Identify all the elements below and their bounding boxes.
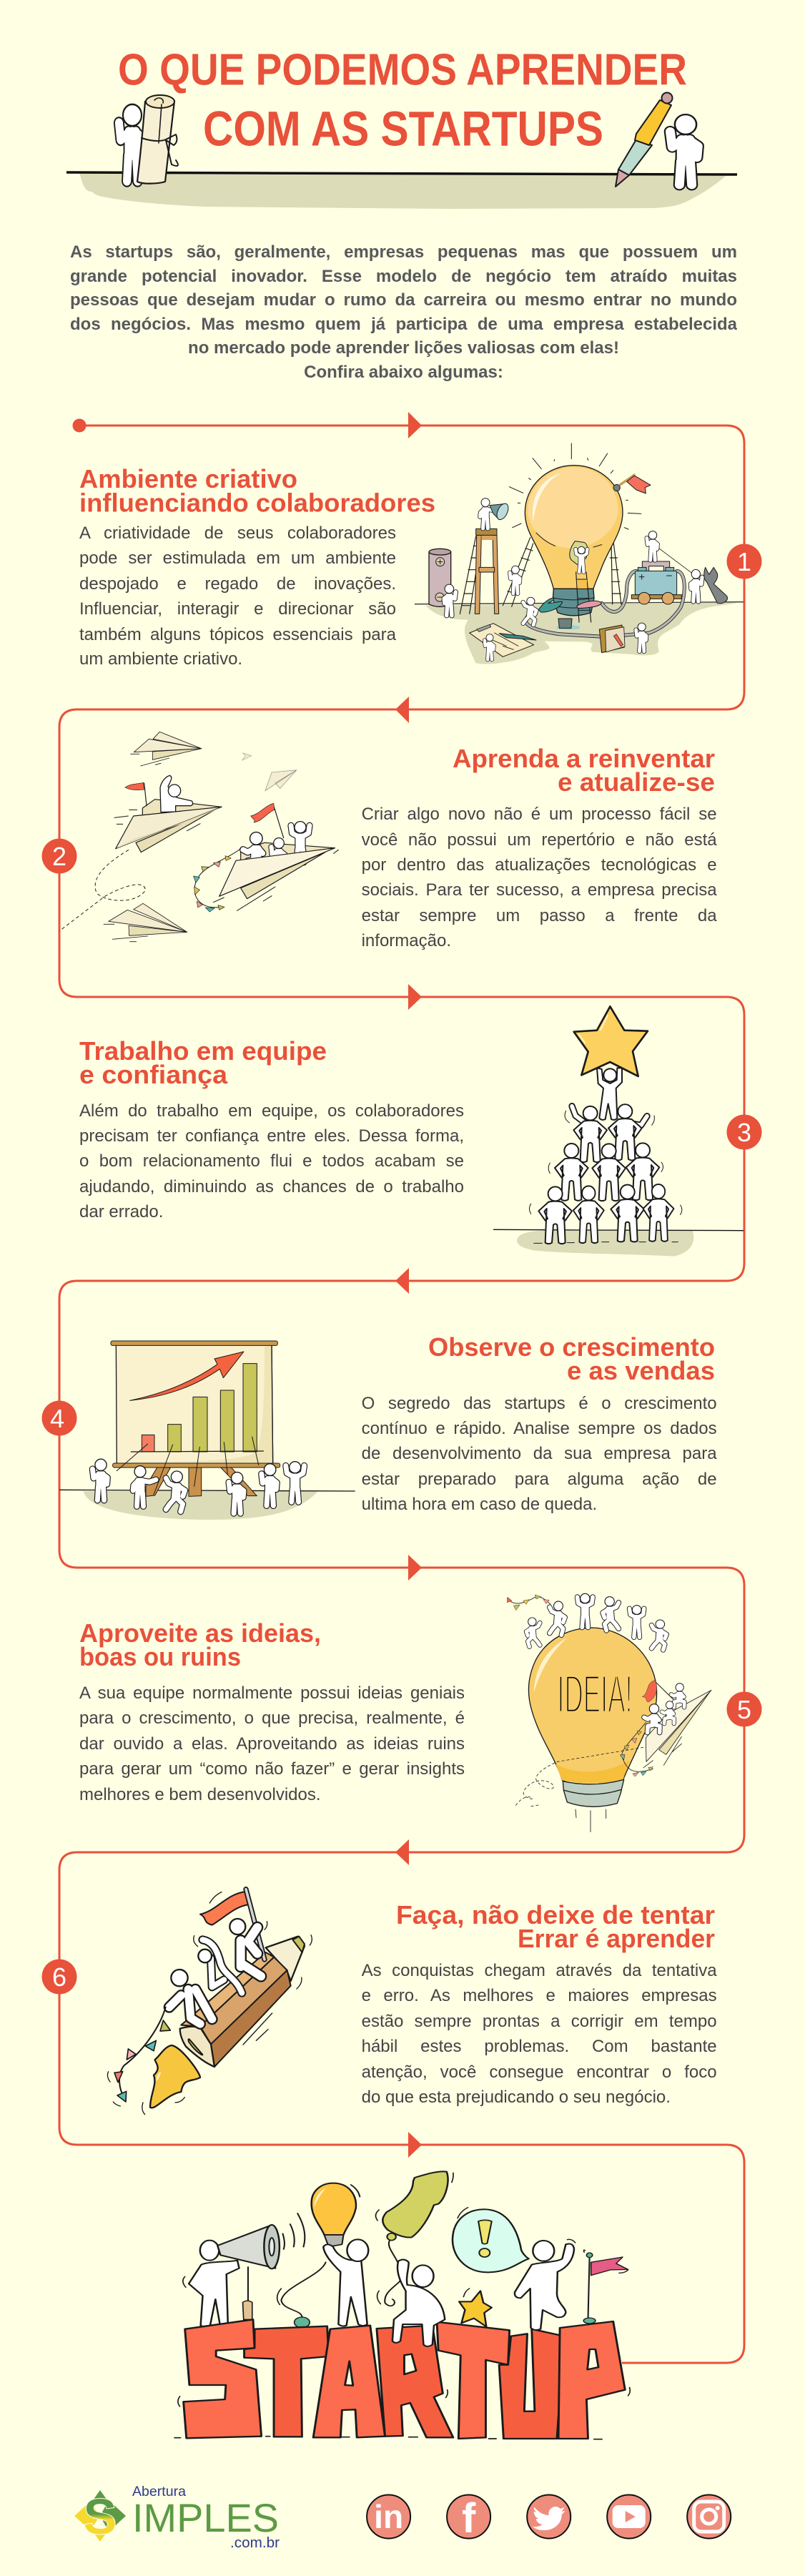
circle number 4 (41, 1400, 77, 1436)
motion marks (107, 1892, 312, 2115)
pencil (180, 1937, 305, 2067)
text block 5: para o crescimento, o que precisa, realmente, é (79, 1709, 465, 1728)
ladders behind bulb (503, 538, 621, 606)
icon: S diamond (74, 2489, 126, 2545)
text block 6: atenção, você consegue encontrar o foco (362, 2063, 717, 2082)
text block 6: hábil estes problemas. Com bastante (362, 2037, 717, 2056)
heading 4: Observe o crescimento (428, 1332, 715, 1362)
title: COM AS STARTUPS (203, 102, 603, 157)
cables (525, 571, 684, 636)
text block 2: você não possui um repertório e não está (362, 830, 717, 850)
man with raised arm (515, 2241, 574, 2330)
heading 4 (428, 1332, 715, 1385)
text block 4: de desenvolvimento da sua empresa para (362, 1444, 717, 1463)
circle number 3 (726, 1114, 762, 1150)
letter T (437, 2322, 510, 2439)
heading 3: e confiança (79, 1060, 228, 1089)
bottom plane (104, 903, 187, 942)
logo: Abertura Simples: .com.br (230, 2535, 280, 2551)
centre ladder and man with cloth (570, 541, 591, 622)
logo: Abertura Simples (74, 2484, 280, 2551)
icon: instagram (687, 2494, 731, 2539)
text block 1: também alguns tópicos essenciais para (79, 625, 396, 644)
text block 1: despojado e regado de inovações. (79, 574, 396, 594)
intro text: grande potencial inovador. Esse modelo de negócio tem atraído muitas (70, 267, 737, 286)
circle number 5 (726, 1692, 762, 1726)
intro text: Confira abaixo algumas: (304, 363, 503, 382)
heading 3 (79, 1036, 327, 1089)
battery cart (631, 561, 681, 604)
rays (509, 443, 641, 529)
bunting (194, 849, 241, 912)
star (574, 1006, 648, 1076)
dashed path (515, 1747, 643, 1807)
team (92, 1459, 305, 1513)
meter (599, 625, 625, 653)
tiny plane (242, 753, 252, 760)
team on top (526, 1593, 666, 1650)
paint bucket (556, 619, 581, 630)
text block 5 (79, 1683, 465, 1804)
arrow (130, 1352, 244, 1400)
text block 4 (362, 1394, 717, 1514)
text block 2: por dentro das atualizações tecnológicas e (362, 855, 717, 875)
bunting on bulb (620, 1722, 653, 1776)
intro text: dos negócios. Mas mesmo quem já participa de uma empresa estabelecida (70, 315, 737, 334)
ground (425, 603, 738, 664)
illustration 1: lightbulb workshop (415, 443, 744, 664)
motion marks (529, 1111, 682, 1214)
illustration 2: paper planes (59, 732, 338, 942)
text block 5: A sua equipe normalmente possui ideias geniais (79, 1683, 465, 1703)
icon: twitter (527, 2494, 571, 2539)
intro text (70, 242, 737, 382)
megaphone stand (243, 2267, 252, 2319)
letter S (184, 2319, 262, 2438)
text block 3: dar errado. (79, 1202, 163, 1221)
climbers (169, 1919, 261, 2024)
flag (200, 1889, 265, 1960)
bulb (528, 1628, 657, 1781)
heading 5: boas ou ruins (79, 1642, 241, 1671)
pointers (117, 1437, 259, 1495)
heading 3: Trabalho em equipe (79, 1036, 327, 1066)
letter R (377, 2326, 453, 2437)
easel legs (146, 1468, 257, 1496)
text block 3: ajudando, diminuindo as chances de o trabalho (79, 1177, 464, 1196)
text block 1: pode ser estimulada em um ambiente (79, 549, 396, 568)
bar chart (131, 1364, 263, 1452)
letter P (558, 2321, 625, 2439)
text block 1 (79, 523, 396, 669)
text block 4: estar preparado para alguma ação de (362, 1470, 717, 1489)
pink flag (583, 2253, 628, 2324)
bulb (281, 2183, 360, 2328)
bulb (525, 466, 623, 589)
social icons (367, 2494, 731, 2542)
text block 3: precisam ter confiança entre eles. Dessa forma, (79, 1126, 464, 1146)
letter A (313, 2326, 385, 2437)
text block 1: A criatividade de seus colaboradores (79, 523, 396, 543)
man with bulb (323, 2239, 368, 2326)
text block 6: estão sempre prontas a corrigir em tempo (362, 2012, 717, 2031)
bottom row (538, 1184, 673, 1244)
icon: man with scroll (119, 95, 178, 184)
letter U (499, 2329, 564, 2439)
heading 6: Faça, não deixe de tentar (396, 1900, 715, 1929)
top figure (597, 1068, 622, 1120)
clipboard (470, 624, 536, 657)
ladder and stool (460, 529, 499, 614)
heading 1 (79, 464, 435, 518)
illustration 4: growth chart on easel (59, 1341, 355, 1520)
text block 6: As conquistas chegam através da tentativa (362, 1961, 717, 1980)
top plane (131, 732, 202, 766)
star (459, 2291, 492, 2326)
dashed flight path (59, 850, 145, 931)
intro text: no mercado pode aprender lições valiosas com elas! (188, 338, 619, 358)
icon: facebook (447, 2494, 490, 2542)
top bunting (507, 1595, 550, 1611)
plane with team (213, 803, 338, 910)
motion marks (178, 2173, 630, 2407)
text block 3 (79, 1101, 464, 1221)
text block 5: dar ouvido a elas. Aproveitando as ideias ruins (79, 1734, 465, 1754)
battery (429, 549, 451, 606)
title: O QUE PODEMOS APRENDER (118, 46, 687, 95)
text block 4: O segredo das startups é o crescimento (362, 1394, 717, 1413)
icon: linkedin (367, 2494, 410, 2539)
text block 6 (362, 1961, 717, 2107)
illustration 7: STARTUP letters with team (174, 2171, 630, 2439)
heading 2 (453, 744, 715, 797)
text block 3: o bom relacionamento flui e todos acabam se (79, 1151, 464, 1171)
text block 2 (362, 805, 717, 950)
logo: Abertura Simples: Abertura (132, 2484, 186, 2499)
second row (572, 1104, 647, 1162)
circle number 4: 4 (50, 1404, 64, 1433)
icon: man with pen (616, 93, 698, 187)
illustration 6: pencil rocket (107, 1889, 312, 2115)
sitting man (392, 2260, 445, 2346)
circle number 3: 3 (737, 1118, 751, 1147)
text block 2: Criar algo novo não é um processo fácil se (362, 805, 717, 824)
plugs (538, 598, 563, 612)
illustration 5: IDEIA bulb with team (507, 1593, 711, 1832)
text block 5: para gerar um “como não fazer” e gerar insights (79, 1759, 465, 1779)
illustration 3: human pyramid with star (493, 1006, 744, 1257)
intro text: As startups são, geralmente, empresas pequenas mas que possuem um (70, 242, 737, 262)
heading 5 (79, 1618, 321, 1671)
socket (553, 589, 594, 616)
bulb base (563, 1779, 624, 1806)
circle number 2: 2 (52, 842, 66, 871)
circle number 2 (41, 838, 77, 874)
heading 5: Aproveite as ideias, (79, 1618, 321, 1648)
heading 2: Aprenda a reinventar (453, 744, 715, 773)
heading 1: influenciando colaboradores (79, 488, 435, 518)
letter T (245, 2326, 329, 2437)
title (118, 46, 687, 157)
icon: linkedin: in (374, 2498, 403, 2535)
text block 3: Além do trabalho em equipe, os colaboradores (79, 1101, 464, 1121)
heading 2: e atualize-se (558, 767, 715, 797)
balloon (382, 2171, 448, 2306)
text block 4: contínuo e rápido. Analise sempre os dados (362, 1419, 717, 1438)
flag on bulb (613, 474, 651, 493)
circle number 6: 6 (52, 1962, 66, 1992)
small far plane (265, 770, 297, 791)
circle number 1: 1 (737, 547, 751, 576)
man with megaphone (189, 2213, 305, 2326)
text block 6: do que esta prejudicando o seu negócio. (362, 2088, 671, 2107)
icon: facebook: f (462, 2495, 476, 2542)
illustration 5: IDEIA bulb with team: IDEIA! (557, 1663, 633, 1724)
text block 2: estar sempre um passo a frente da (362, 906, 717, 925)
text block 2: sociais. Para ter sucesso, a empresa precisa (362, 880, 717, 900)
big plane with man (114, 775, 222, 852)
circle number 6 (41, 1960, 77, 1994)
circle number 1 (726, 544, 762, 579)
connector path (59, 412, 744, 2363)
third row (555, 1143, 659, 1201)
plane with team (642, 1681, 711, 1768)
text block 1: Influenciar, interagir e direcionar são (79, 599, 396, 619)
icon: S diamond: S (84, 2489, 117, 2545)
heading 4: e as vendas (567, 1356, 715, 1385)
wrench (704, 567, 727, 604)
text block 4: ultima hora em caso de queda. (362, 1495, 597, 1514)
logo: Abertura Simples: IMPLES (132, 2495, 279, 2540)
man with megaphone (480, 498, 510, 529)
intro text: pessoas que desejam mudar o rumo da carreira ou mesmo entrar no mundo (70, 290, 737, 310)
heading 6: Errar é aprender (518, 1924, 715, 1953)
speech bubble (453, 2209, 529, 2272)
text block 1: um ambiente criativo. (79, 649, 242, 669)
board (111, 1341, 280, 1468)
header illustration: ground with scroll and pen (66, 93, 737, 209)
ground dashes (534, 1242, 678, 1243)
flame (150, 2045, 200, 2108)
heading 1: Ambiente criativo (79, 464, 297, 493)
bunting (114, 2007, 170, 2102)
circle number 5: 5 (737, 1695, 751, 1724)
text block 6: e erro. As melhores e maiores empresas (362, 1986, 717, 2005)
text block 2: informação. (362, 931, 451, 950)
icon: youtube (607, 2494, 651, 2539)
heading 6 (396, 1900, 715, 1953)
text block 5: melhores e bem desenvolvidos. (79, 1785, 321, 1804)
